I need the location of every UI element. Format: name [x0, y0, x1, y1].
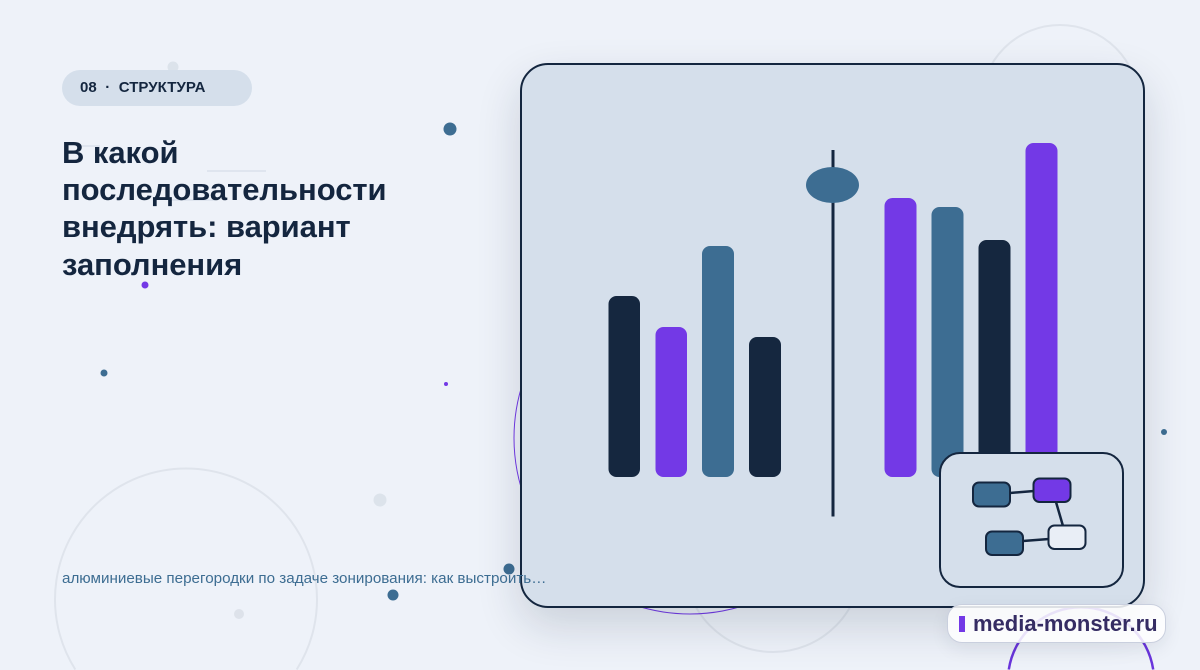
left bar group — [608, 246, 781, 477]
main illustration panel — [520, 63, 1145, 608]
title: В какой последовательности внедрять: вариант заполнения — [62, 135, 387, 282]
right bar group — [884, 143, 1058, 477]
section badge: 08 · СТРУКТУРА — [80, 79, 205, 96]
subtitle text: алюминиевые перегородки по задаче зонирования: как выстроить… — [62, 570, 546, 587]
inset flow diagram — [940, 453, 1123, 587]
brand tag: media-monster.ru — [973, 611, 1158, 636]
divider with oval marker — [806, 150, 859, 516]
section badge — [62, 70, 252, 106]
brand tag — [947, 604, 1166, 643]
